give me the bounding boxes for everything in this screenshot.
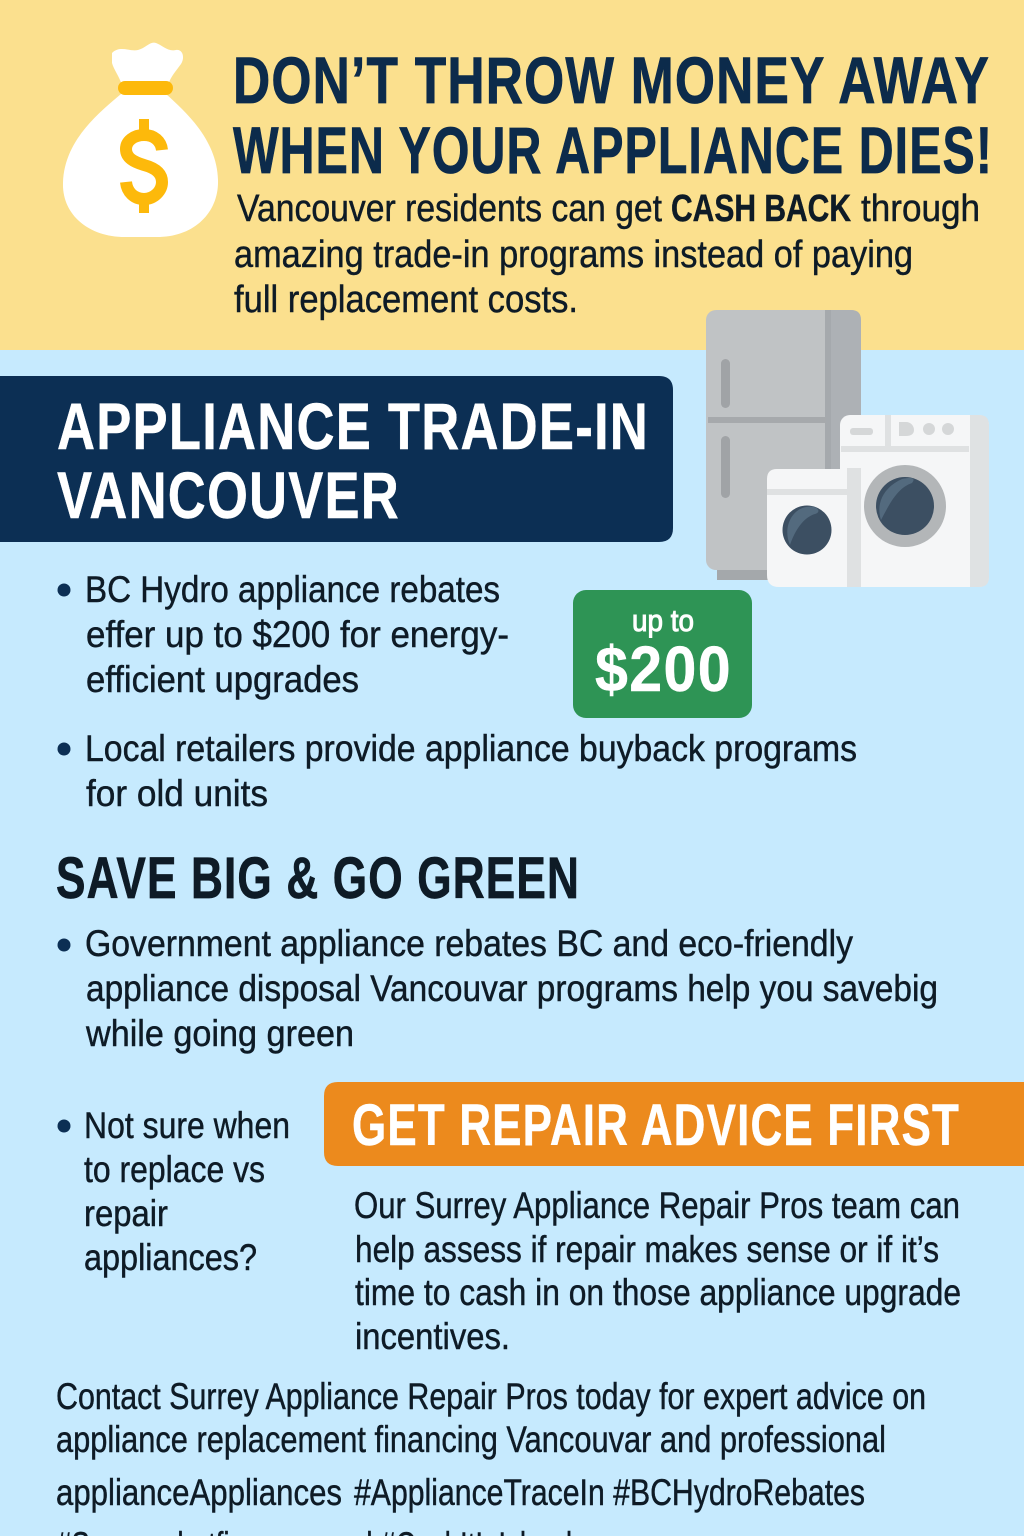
text block: contact: appliance replacement financing Vancouvar and professional bbox=[56, 1419, 886, 1460]
intro text: CASH BACK bbox=[671, 188, 851, 230]
bullet list: green programs bbox=[58, 923, 938, 1054]
bullet list: green programs: appliance disposal Vancouvar programs help you savebig bbox=[86, 968, 938, 1009]
intro text bbox=[234, 188, 980, 321]
banner: appliance trade-in vancouver: APPLIANCE TRADE-IN bbox=[57, 389, 649, 463]
bullet list: rebates: BC Hydro appliance rebates bbox=[85, 569, 500, 610]
bullet list: rebates: Local retailers provide appliance buyback programs bbox=[85, 728, 857, 769]
title bbox=[233, 43, 993, 187]
bullet list: rebates: effer up to $200 for energy- bbox=[86, 614, 509, 655]
icon: small dryer bbox=[767, 468, 861, 587]
badge: up to $200 bbox=[573, 590, 752, 718]
text block: contact: #ApplianceTraceIn #BCHydroRebates bbox=[354, 1472, 865, 1513]
intro text: Vancouver residents can get bbox=[237, 188, 662, 230]
intro text: full replacement costs. bbox=[234, 279, 578, 321]
header panel bbox=[0, 0, 1024, 350]
intro text: amazing trade-in programs instead of paying bbox=[234, 234, 913, 276]
badge: up to $200: up to bbox=[632, 603, 694, 638]
banner: appliance trade-in vancouver bbox=[0, 376, 673, 542]
bullet list: green programs: Government appliance rebates BC and eco-friendly bbox=[85, 923, 853, 964]
bullet: replace vs repair: to replace vs bbox=[84, 1149, 265, 1190]
text block: repair advice: incentives. bbox=[355, 1316, 510, 1357]
icon: washing machine bbox=[840, 415, 989, 587]
text block: repair advice bbox=[354, 1185, 961, 1357]
bullet: replace vs repair: appliances? bbox=[84, 1237, 257, 1278]
bullet: replace vs repair: Not sure when bbox=[84, 1105, 290, 1146]
bullet list: rebates: efficient upgrades bbox=[86, 659, 359, 700]
icon: money bag bbox=[63, 43, 218, 237]
bullet list: green programs: while going green bbox=[85, 1013, 354, 1054]
illustration: appliances bbox=[706, 310, 989, 587]
text block: repair advice: help assess if repair makes sense or if it’s bbox=[355, 1229, 939, 1270]
bullet: replace vs repair: repair bbox=[84, 1193, 168, 1234]
intro text: through bbox=[861, 188, 980, 230]
icon: refrigerator bbox=[706, 310, 861, 580]
heading: save big and go green: SAVE BIG & GO GREEN bbox=[56, 846, 580, 911]
text block: contact bbox=[56, 1376, 926, 1536]
bullet list: rebates bbox=[58, 569, 857, 814]
banner: appliance trade-in vancouver: VANCOUVER bbox=[57, 458, 400, 532]
bullet: replace vs repair bbox=[58, 1105, 290, 1278]
bullet list: rebates: for old units bbox=[86, 773, 268, 814]
badge: up to $200: $200 bbox=[595, 633, 732, 705]
text block: contact: applianceAppliances bbox=[56, 1472, 342, 1513]
